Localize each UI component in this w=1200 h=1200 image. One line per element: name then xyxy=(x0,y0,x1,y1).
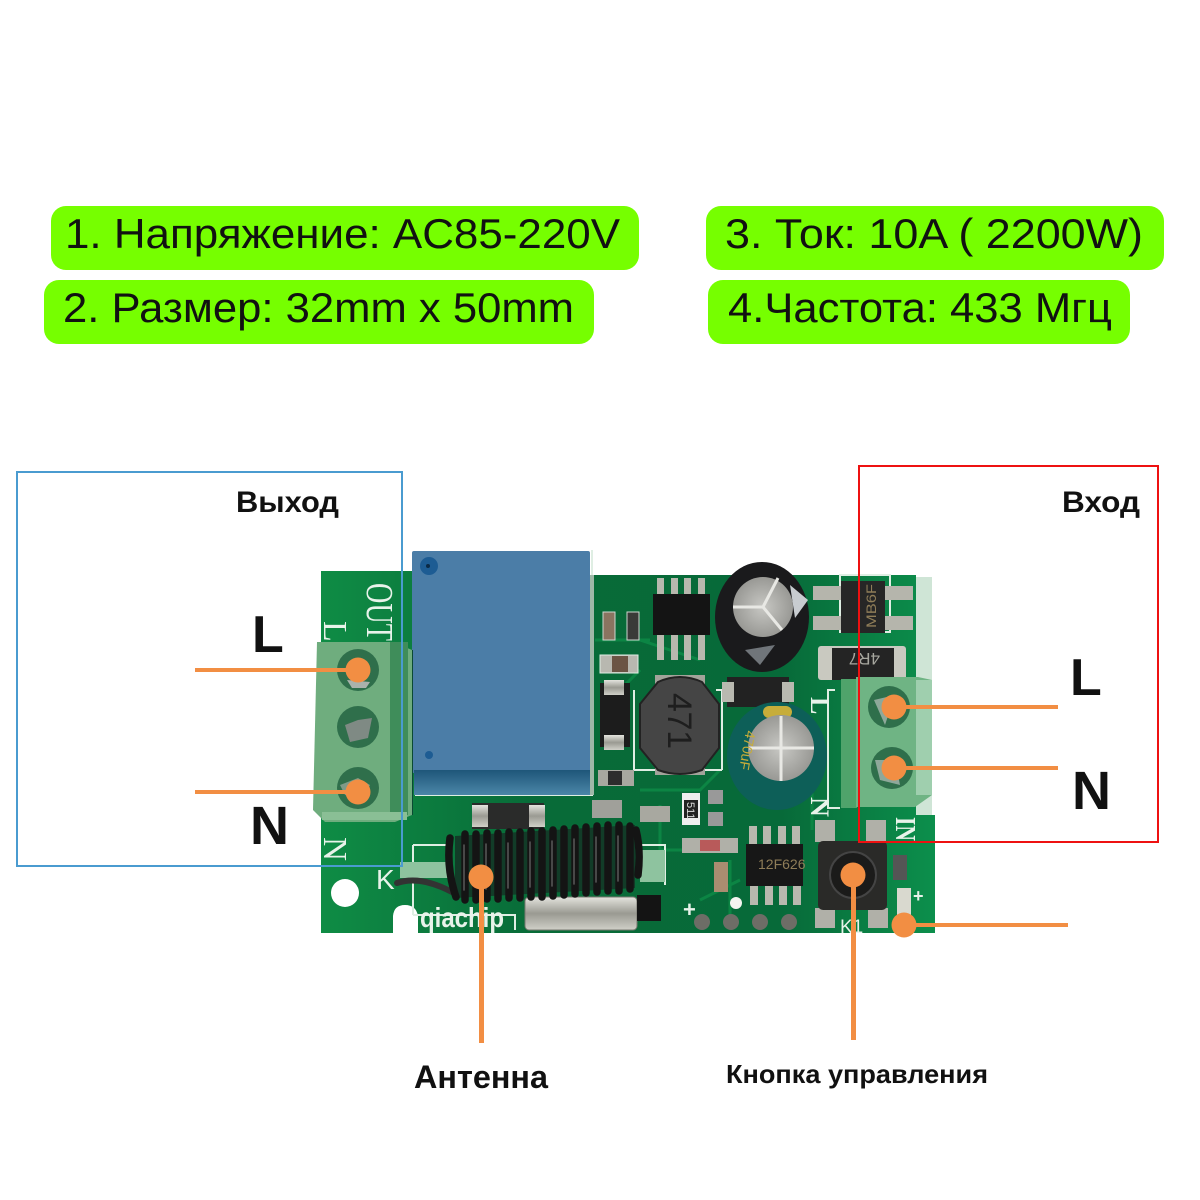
mounting hole xyxy=(331,879,359,907)
green electrolytic capacitor: 470uF xyxy=(736,729,759,771)
silkscreen qiachip: qiachip xyxy=(420,902,504,933)
label: output L: L xyxy=(252,606,284,664)
label: antenna: Антенна xyxy=(414,1059,548,1095)
pcb pale edge strip xyxy=(916,577,932,815)
antenna coil xyxy=(397,825,639,900)
silkscreen plus right: + xyxy=(913,886,924,906)
label: control button: Кнопка управления xyxy=(726,1059,988,1089)
pcb traces xyxy=(595,640,812,920)
heading: input: Вход xyxy=(1062,486,1140,519)
quartz crystal xyxy=(525,895,661,930)
relay body xyxy=(404,551,594,815)
label: input L: L xyxy=(1070,649,1102,707)
silkscreen L right: L xyxy=(805,697,834,714)
output region frame xyxy=(17,472,402,866)
small smd resistors xyxy=(592,612,907,892)
silkscreen K: K xyxy=(376,864,395,895)
green electrolytic capacitor xyxy=(727,702,827,810)
511 resistor: 511 xyxy=(684,802,696,820)
antenna pcb strip left end xyxy=(400,862,448,878)
silkscreen K1: K1 xyxy=(840,917,863,938)
bridge rectifier MB6F xyxy=(813,581,913,633)
spec pill 4: frequency: 4.Частота: 433 Мгц xyxy=(728,284,1112,331)
silkscreen L left: L xyxy=(316,621,353,642)
callout: output L xyxy=(195,658,370,682)
ES1 diode xyxy=(722,677,794,707)
spec pill 3: current xyxy=(706,206,1164,270)
callout: input N xyxy=(882,756,1058,780)
power inductor 471 xyxy=(640,675,719,775)
relay circuit board xyxy=(313,550,935,938)
511 resistor xyxy=(682,793,700,825)
silkscreen OUT: OUT xyxy=(358,583,400,641)
callout: button xyxy=(840,862,866,1040)
pcb base xyxy=(321,571,935,933)
bottom solder pads xyxy=(694,897,797,930)
silkscreen N left: N xyxy=(316,837,353,861)
label: input N: N xyxy=(1072,761,1111,821)
tactile control button xyxy=(815,820,888,928)
callout: output N xyxy=(195,780,370,804)
silkscreen outlines xyxy=(413,550,890,930)
callout: led xyxy=(892,912,1068,938)
spec pill 1: voltage xyxy=(51,206,639,270)
callout: antenna xyxy=(468,864,494,1043)
SOIC chip top xyxy=(653,578,710,660)
black electrolytic capacitor xyxy=(715,562,809,672)
spec pill 2: size: 2. Размер: 32mm x 50mm xyxy=(63,284,574,331)
bridge rectifier MB6F: MB6F xyxy=(863,584,879,628)
silkscreen IN: IN xyxy=(889,817,920,841)
spec pill 3: current: 3. Ток: 10A ( 2200W) xyxy=(725,210,1143,257)
silkscreen N right: N xyxy=(805,797,834,817)
indicator led xyxy=(897,888,911,916)
silkscreen plus: + xyxy=(683,897,696,922)
input region frame xyxy=(859,466,1158,842)
12F626 chip xyxy=(746,826,806,905)
12F626 chip: 12F626 xyxy=(758,856,806,872)
spec pill 2: size xyxy=(44,280,594,344)
spec pill 4: frequency xyxy=(708,280,1130,344)
callout: input L xyxy=(882,694,1058,720)
right screw terminal xyxy=(841,677,932,808)
label: output N: N xyxy=(250,796,289,856)
left side smd diode xyxy=(600,680,630,750)
antenna pcb strip right end xyxy=(640,850,665,882)
4R7 inductor xyxy=(818,646,906,680)
heading: output: Выход xyxy=(236,486,339,519)
spec pill 1: voltage: 1. Напряжение: AC85-220V xyxy=(65,210,620,257)
left screw terminal xyxy=(313,642,412,822)
power inductor 471: 471 xyxy=(660,693,698,749)
diode below relay xyxy=(472,803,545,829)
4R7 inductor: 4R7 xyxy=(849,649,880,668)
